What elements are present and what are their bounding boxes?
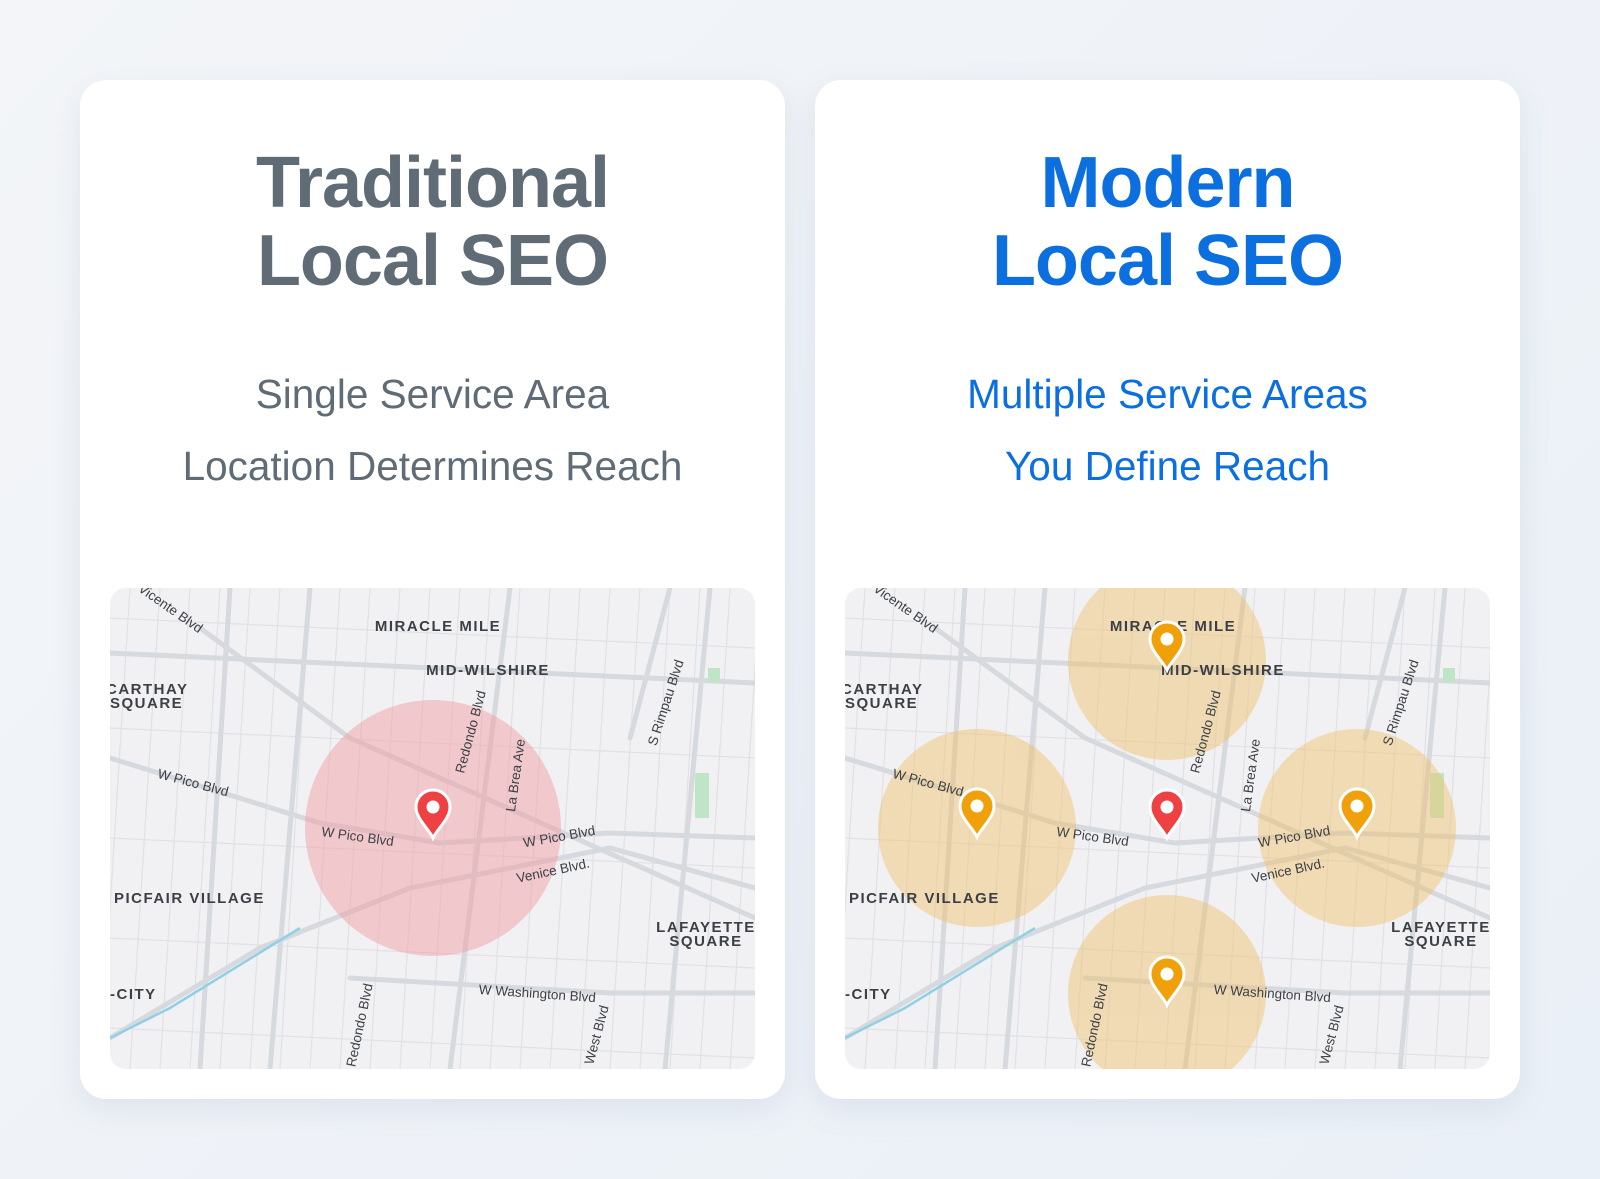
- heading: Modern Local SEO: [992, 143, 1343, 301]
- panel: modern local SEO: [815, 80, 1520, 1099]
- map: single service radius: [110, 588, 755, 1069]
- service area circle: [305, 700, 561, 956]
- map: single service radius: MID-WILSHIRE: [426, 662, 550, 679]
- map: single service radius: S Rimpau Blvd: [645, 658, 687, 747]
- map: single service radius: W Pico Blvd: [522, 823, 596, 850]
- map: multiple service areas: PICFAIR VILLAGE: [849, 890, 1000, 907]
- text: single service area: Single Service Area: [256, 371, 609, 417]
- service area circles: [878, 562, 1456, 1093]
- text: you define reach: You Define Reach: [1005, 443, 1330, 489]
- map: single service radius: MIRACLE MILE: [375, 618, 501, 635]
- icon: red location pin: [1150, 790, 1184, 838]
- map: multiple service areas: S Rimpau Blvd: [1380, 658, 1422, 747]
- map: single service radius: Redondo Blvd: [452, 689, 489, 775]
- map: single service radius: LAFAYETTE: [656, 919, 755, 936]
- map: multiple service areas: SQUARE: [1404, 933, 1478, 950]
- map: single service radius: W Pico Blvd: [156, 766, 230, 799]
- map: single service radius: SQUARE: [669, 933, 743, 950]
- map: multiple service areas: -CITY: [845, 986, 892, 1003]
- map: single service radius: SQUARE: [110, 695, 183, 712]
- heading: Modern Local SEO: Modern: [1040, 143, 1294, 223]
- map: multiple service areas: MIRACLE MILE: [1110, 618, 1236, 635]
- map: multiple service areas: MID-WILSHIRE: [1161, 662, 1285, 679]
- panel: traditional local SEO: [80, 80, 785, 1099]
- map: multiple service areas: W Pico Blvd: [1257, 823, 1331, 850]
- map: single service radius: Venice Blvd.: [515, 856, 591, 886]
- map: multiple service areas: W Washington Blvd: [1213, 982, 1331, 1005]
- map: single service radius: La Brea Ave: [503, 738, 528, 813]
- map: single service radius: -CITY: [110, 986, 157, 1003]
- icons: orange location pins: [960, 622, 1374, 1005]
- heading: Traditional Local SEO: Traditional: [256, 143, 609, 223]
- map: multiple service areas: W Pico Blvd: [1056, 824, 1130, 849]
- text: multiple service areas: Multiple Service Areas: [967, 371, 1368, 417]
- map: single service radius: West Blvd: [582, 1004, 612, 1066]
- map: multiple service areas: West Blvd: [1317, 1004, 1347, 1066]
- map: multiple service areas: Redondo Blvd: [1187, 689, 1224, 775]
- map: single service radius: W Washington Blvd: [478, 982, 596, 1005]
- icon: red location pin: [416, 790, 450, 838]
- map: single service radius: Redondo Blvd: [343, 982, 376, 1068]
- text: location determines reach: Location Determines Reach: [183, 443, 682, 489]
- map: multiple service areas: SQUARE: [845, 695, 918, 712]
- heading: Modern Local SEO: Local SEO: [992, 221, 1343, 301]
- map: multiple service areas: W Pico Blvd: [891, 766, 965, 799]
- map: single service radius: PICFAIR VILLAGE: [114, 890, 265, 907]
- map: multiple service areas: Venice Blvd.: [1250, 856, 1326, 886]
- map: multiple service areas: La Brea Ave: [1238, 738, 1263, 813]
- heading: Traditional Local SEO: Local SEO: [257, 221, 608, 301]
- map: multiple service areas: [845, 588, 1490, 1069]
- heading: Traditional Local SEO: [256, 143, 609, 301]
- map: multiple service areas: Redondo Blvd: [1078, 982, 1111, 1068]
- map: single service radius: W Pico Blvd: [321, 824, 395, 849]
- map: multiple service areas: LAFAYETTE: [1391, 919, 1490, 936]
